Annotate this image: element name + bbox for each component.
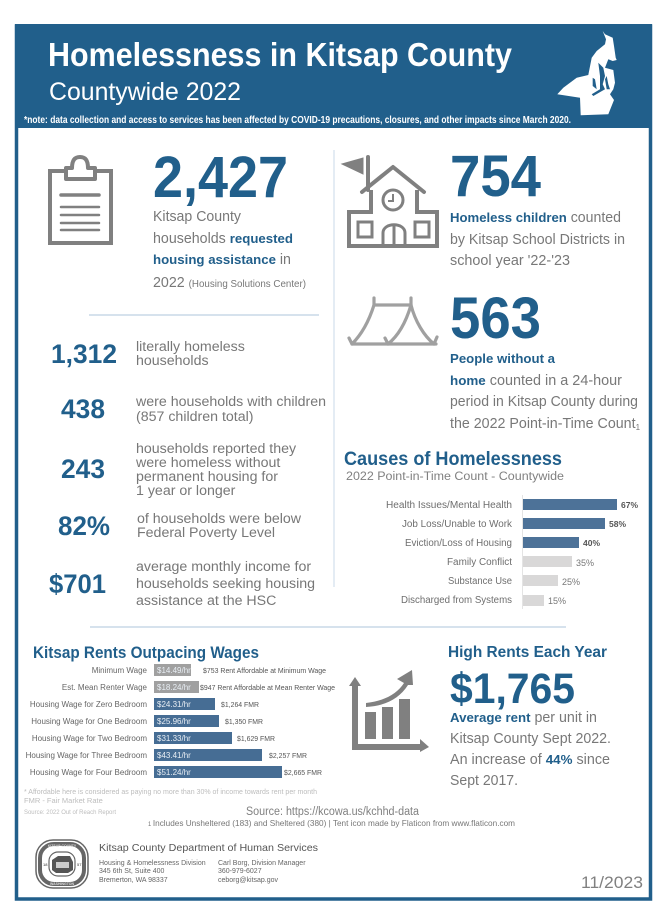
bar chart: wages: $25.96/hr	[157, 717, 191, 726]
bar chart: wages: $753 Rent Affordable at Minimum Wage	[203, 666, 326, 675]
icon: county seal: KITSAP COUNTY	[48, 844, 77, 848]
source line: Source: https://kcowa.us/kchhd-data	[246, 806, 420, 818]
stat: 1,312: households	[136, 353, 209, 369]
department contact block: ceborg@kitsap.gov	[218, 877, 279, 884]
icon: rising bar chart	[349, 670, 429, 752]
stat: 82%	[58, 511, 302, 541]
bar chart: wages: Housing Wage for Two Bedroom	[32, 734, 147, 743]
description: people without a home: home counted in a 24-hour	[450, 373, 622, 389]
stat: 438	[61, 394, 326, 425]
stat: $701	[49, 559, 315, 609]
stat: $701: assistance at the HSC	[136, 593, 276, 609]
heading: Causes of Homelessness	[344, 449, 562, 470]
panel: rents outpacing wages	[24, 644, 335, 816]
bar chart: causes: 67%	[621, 500, 638, 510]
panel: homeless children	[342, 144, 625, 269]
bar chart: wages: Housing Wage for Four Bedroom	[30, 768, 147, 777]
stat: $1,765: $1,765	[450, 665, 575, 713]
icon: school	[342, 157, 437, 246]
stat: 563: 563	[450, 286, 541, 351]
heading: High Rents Each Year	[448, 644, 607, 661]
stat: 243	[61, 441, 297, 499]
panel: point in time count	[349, 286, 641, 432]
stat: 1,312: literally homeless	[136, 339, 245, 355]
bar chart: causes	[386, 495, 638, 609]
stat: $701: households seeking housing	[136, 576, 315, 592]
department contact block: 360-979-6027	[218, 868, 262, 875]
department contact block: Bremerton, WA 98337	[99, 877, 168, 884]
bar chart: wages: Housing Wage for Three Bedroom	[26, 751, 147, 760]
stat: 1,312	[51, 339, 245, 369]
panel: household stats	[49, 339, 326, 609]
bar chart: causes: Discharged from Systems	[401, 595, 512, 606]
bar chart: wages	[26, 664, 335, 778]
stat: 438: were households with children	[135, 394, 326, 410]
bar chart: wages: $1,350 FMR	[225, 717, 263, 726]
stat: 243: were homeless without	[135, 455, 280, 471]
subheading: 2022 Point-in-Time Count - Countywide	[346, 471, 564, 483]
stat: 82%: Federal Poverty Level	[137, 525, 275, 541]
icon: county map	[557, 31, 617, 115]
description: people without a home	[450, 351, 641, 432]
bar chart: wages: $43.41/hr	[157, 751, 191, 760]
description: households requested assistance: housing assistance in	[153, 252, 291, 268]
bar chart: wages: Housing Wage for One Bedroom	[31, 717, 147, 726]
date: 11/2023	[581, 874, 643, 892]
stat: 82%: of households were below	[137, 511, 302, 527]
bar chart: causes: 40%	[583, 538, 600, 548]
bar chart: causes: 25%	[562, 577, 580, 587]
stat: $701: $701	[49, 569, 106, 599]
bar chart: wages: $51.24/hr	[157, 768, 191, 777]
stat: 243: households reported they	[136, 441, 297, 457]
bar chart: wages: $2,257 FMR	[269, 751, 307, 760]
description: homeless children	[450, 210, 625, 269]
icon: county seal	[36, 840, 88, 888]
stat: 243: 243	[61, 454, 105, 484]
bar chart: causes: 58%	[609, 519, 626, 529]
bar chart: wages: $2,665 FMR	[284, 768, 322, 777]
bar chart: wages: $24.31/hr	[157, 700, 191, 709]
bar chart: causes: Job Loss/Unable to Work	[402, 519, 513, 530]
footnote: 1 Includes Unsheltered (183) and Sheltered (380) | Tent icon made by Flaticon from www.flaticon.com	[148, 818, 515, 828]
description: average rent: Average rent per unit in	[450, 710, 597, 726]
description: people without a home: People without a	[450, 351, 556, 366]
title: Homelessness in Kitsap County	[48, 36, 513, 73]
stat: 1,312: 1,312	[51, 339, 117, 369]
stat: 438: (857 children total)	[136, 409, 254, 425]
bar chart: wages: Minimum Wage	[92, 666, 148, 675]
bar chart: wages: $1,264 FMR	[221, 700, 259, 709]
icon: county seal: 18	[43, 862, 48, 867]
stat: $701: average monthly income for	[136, 559, 311, 575]
icon: county seal: 57	[77, 862, 82, 867]
description: homeless children: Homeless children counted	[450, 210, 621, 226]
department contact block: Carl Borg, Division Manager	[218, 860, 306, 867]
description: households requested assistance: households requested	[153, 231, 293, 247]
description: people without a home: 1	[636, 423, 641, 432]
description: people without a home: the 2022 Point-in-Time Count	[450, 416, 636, 432]
panel: requested assistance	[50, 145, 306, 291]
bar chart: wages: $18.24/hr	[157, 683, 191, 692]
department contact block: Housing & Homelessness Division	[99, 860, 206, 867]
department contact block: Kitsap County Department of Human Services	[99, 842, 318, 854]
stat: 754: 754	[450, 144, 541, 209]
panel: high rents each year	[349, 644, 611, 789]
divider	[90, 626, 566, 628]
bar chart: causes: Substance Use	[448, 576, 512, 587]
icon: county seal: WASHINGTON	[50, 882, 74, 886]
stat: 2,427: 2,427	[153, 145, 288, 210]
bar chart: wages: $1,629 FMR	[237, 734, 275, 743]
icon: clipboard	[50, 157, 111, 243]
icon: tent	[349, 298, 437, 344]
chart footnotes: FMR - Fair Market Rate	[24, 796, 103, 805]
chart footnotes: Source: 2022 Out of Reach Report	[24, 810, 116, 816]
description: average rent	[450, 710, 611, 789]
description: households requested assistance	[153, 209, 306, 291]
panel: causes of homelessness	[344, 449, 638, 609]
heading: Kitsap Rents Outpacing Wages	[33, 644, 259, 662]
bar chart: causes: 35%	[576, 558, 594, 568]
bar chart: wages: $947 Rent Affordable at Mean Renter Wage	[200, 683, 335, 692]
subtitle: Countywide 2022	[49, 78, 241, 106]
header band	[15, 24, 652, 128]
bar chart: causes: Health Issues/Mental Health	[386, 500, 512, 511]
bar chart: causes: Family Conflict	[447, 557, 512, 568]
bar chart: wages: $31.33/hr	[157, 734, 191, 743]
stat: 438: 438	[61, 394, 105, 424]
bar chart: causes: 15%	[548, 596, 566, 606]
divider	[89, 314, 319, 316]
department contact block: 345 6th St, Suite 400	[99, 868, 164, 875]
description: average rent: Sept 2017.	[450, 773, 518, 789]
stat: 243: 1 year or longer	[136, 483, 236, 499]
bar chart: wages: Housing Wage for Zero Bedroom	[30, 700, 147, 709]
description: average rent: An increase of 44% since	[450, 752, 610, 768]
description: homeless children: by Kitsap School Districts in	[450, 232, 625, 248]
stat: 82%: 82%	[58, 511, 110, 541]
department contact block	[99, 842, 318, 884]
description: households requested assistance: Kitsap County	[153, 209, 242, 225]
bar chart: wages: Est. Mean Renter Wage	[62, 683, 148, 692]
description: households requested assistance: 2022 (Housing Solutions Center)	[153, 275, 306, 291]
description: homeless children: school year '22-'23	[450, 253, 570, 269]
chart footnotes	[24, 787, 317, 816]
description: people without a home: period in Kitsap County during	[450, 394, 638, 410]
chart footnotes: * Affordable here is considered as paying no more than 30% of income towards rent per month	[24, 787, 317, 796]
bar chart: wages: $14.49/hr	[157, 666, 191, 675]
bar chart: causes: Eviction/Loss of Housing	[405, 538, 512, 549]
stat: 243: permanent housing for	[136, 469, 278, 485]
description: average rent: Kitsap County Sept 2022.	[450, 731, 611, 747]
